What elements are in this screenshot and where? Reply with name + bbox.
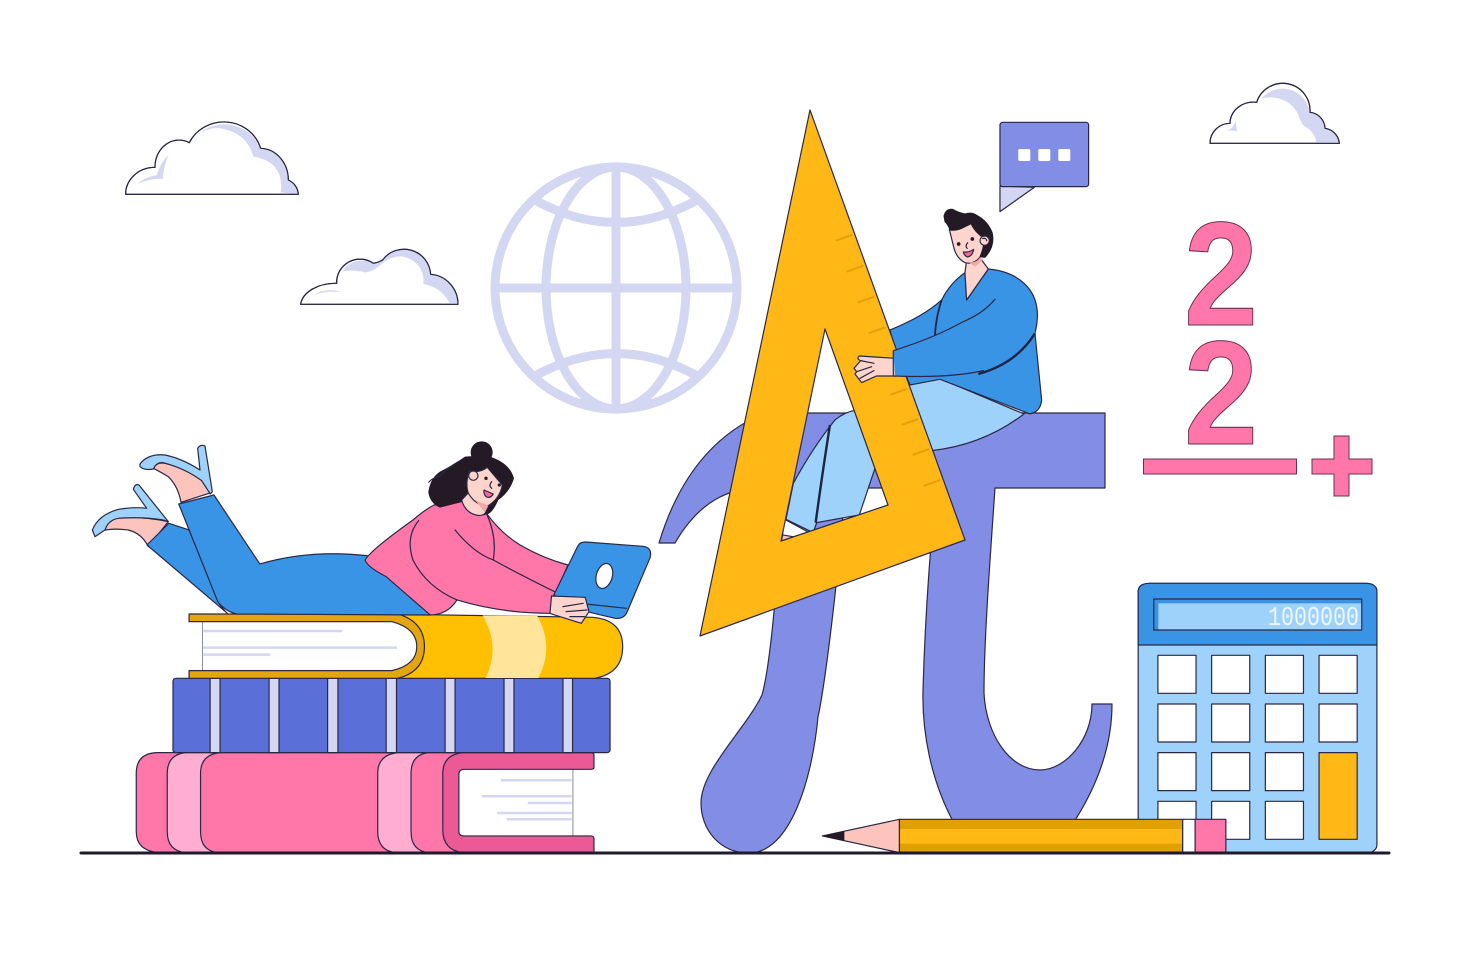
person: woman lying on books [92, 441, 651, 623]
book: pink bottom [136, 753, 594, 853]
calculator display [1154, 599, 1362, 630]
book: blue middle [173, 678, 610, 753]
pi symbol [659, 413, 1112, 853]
man: torso and far arm [890, 269, 1042, 414]
calculator buttons [1158, 655, 1357, 839]
icon: globe [495, 167, 737, 409]
woman: head [428, 441, 514, 516]
set square triangle ruler [700, 110, 965, 636]
man: trousers [781, 379, 1024, 541]
speech bubble [1000, 122, 1089, 212]
laptop [554, 542, 651, 618]
man: neck [965, 260, 988, 300]
fraction two over two plus [1144, 192, 1372, 496]
person: man sitting on pi [781, 209, 1042, 541]
woman: hand [550, 596, 589, 623]
woman: trousers [147, 495, 430, 615]
man: near arm and hand [854, 299, 1035, 383]
book stack [136, 614, 623, 853]
woman: sweater [365, 501, 568, 615]
cloud: upper right [1210, 83, 1339, 143]
fraction two over two plus: 2 [1184, 192, 1258, 357]
cloud: middle left [301, 249, 458, 304]
calculator readout: 1000000 [1268, 604, 1359, 634]
man: head [944, 209, 993, 267]
pencil [822, 819, 1226, 853]
cloud: upper left [126, 122, 298, 194]
book: yellow top [189, 614, 623, 678]
fraction two over two plus: 2 [1184, 311, 1258, 476]
calculator [1138, 583, 1377, 853]
ground line [81, 852, 1389, 854]
woman: shoes [92, 445, 212, 547]
